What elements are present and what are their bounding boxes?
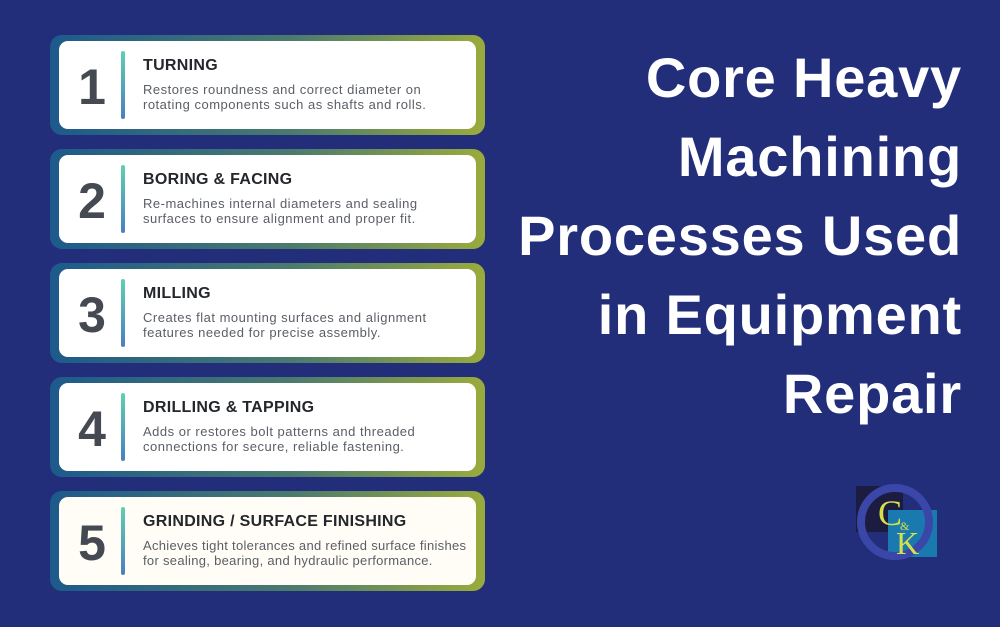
card 1: TURNING: [143, 57, 218, 74]
title: Processes Used: [518, 204, 962, 267]
card 4: Adds or restores bolt patterns and threaded: [143, 424, 415, 439]
title: Machining: [678, 125, 962, 188]
title: [518, 46, 962, 425]
card 3: MILLING: [143, 285, 211, 302]
card 5: Achieves tight tolerances and refined surface finishes: [143, 538, 466, 553]
card 2: [50, 149, 485, 249]
card 2: Re-machines internal diameters and sealing: [143, 196, 418, 211]
logo: K: [896, 525, 919, 561]
logo: C: [878, 493, 902, 533]
card 5: [50, 491, 485, 591]
card 1: 1: [78, 59, 106, 115]
card 3: Creates flat mounting surfaces and alignment: [143, 310, 427, 325]
card 1: Restores roundness and correct diameter on: [143, 82, 421, 97]
card 5: GRINDING / SURFACE FINISHING: [143, 513, 407, 530]
card 3: features needed for precise assembly.: [143, 325, 381, 340]
logo: [856, 484, 937, 561]
logo: &: [900, 519, 910, 533]
card 4: 4: [78, 401, 106, 457]
card 2: 2: [78, 173, 106, 229]
card 1: rotating components such as shafts and rolls.: [143, 97, 426, 112]
card 3: 3: [78, 287, 106, 343]
card 2: surfaces to ensure alignment and proper fit.: [143, 211, 416, 226]
title: Repair: [783, 362, 962, 425]
card 1: [50, 35, 485, 135]
card 2: BORING & FACING: [143, 171, 292, 188]
card 5: 5: [78, 515, 106, 571]
title: in Equipment: [598, 283, 962, 346]
card 4: connections for secure, reliable fastening.: [143, 439, 404, 454]
card 5: for sealing, bearing, and hydraulic performance.: [143, 553, 433, 568]
card 3: [50, 263, 485, 363]
card 4: [50, 377, 485, 477]
card 4: DRILLING & TAPPING: [143, 399, 314, 416]
title: Core Heavy: [646, 46, 962, 109]
